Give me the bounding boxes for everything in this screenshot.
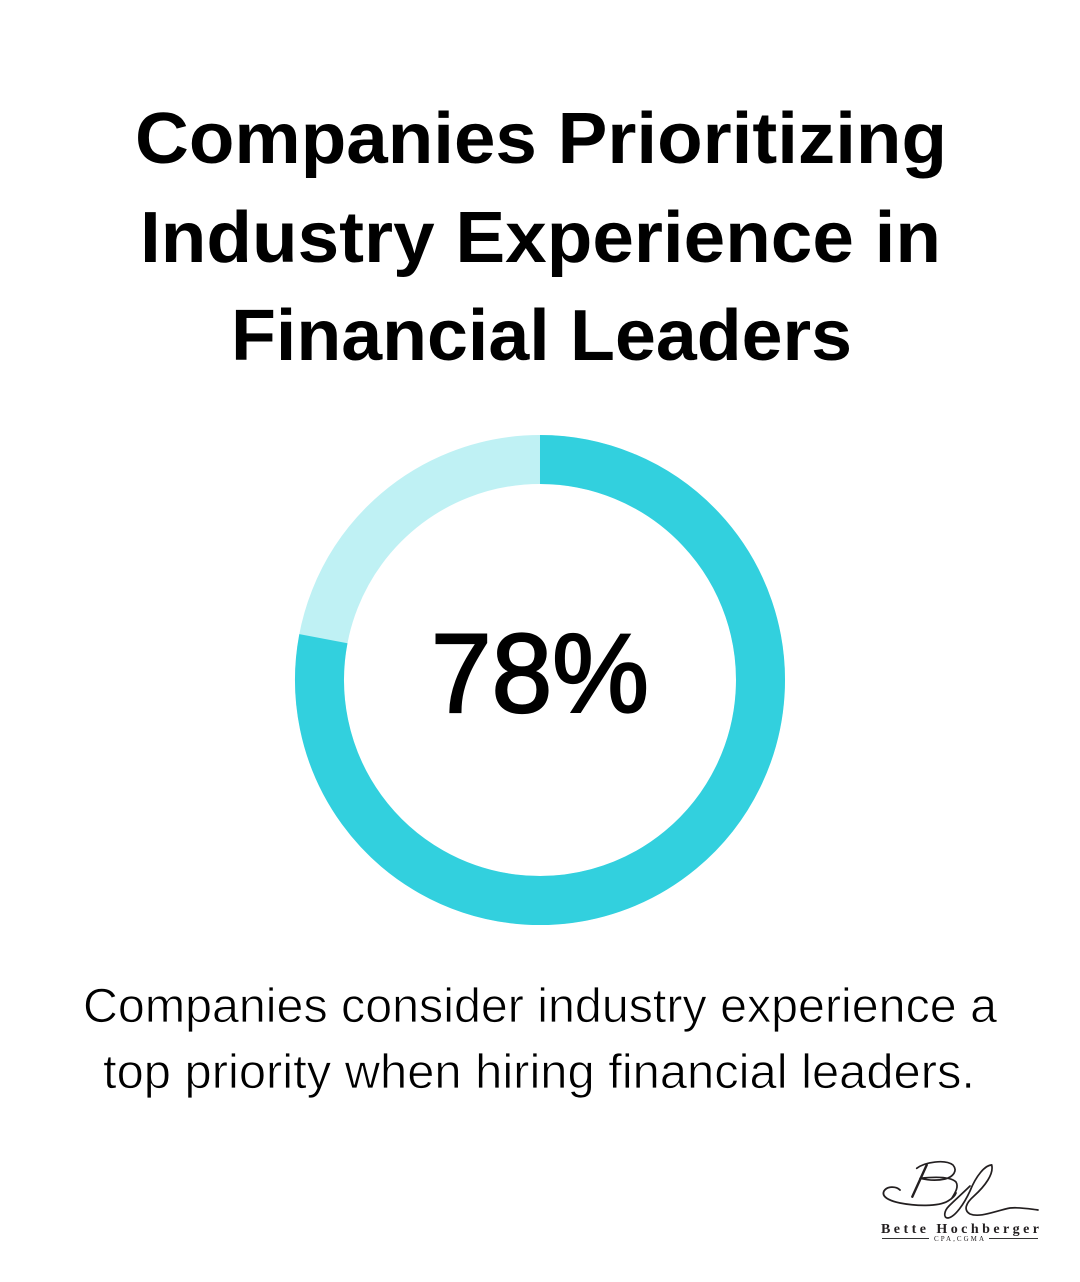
title [135,99,947,376]
title: Companies Prioritizing [135,99,947,179]
description text [83,980,997,1099]
logo rule left [882,1238,929,1239]
logo credentials: CPA,CGMA [934,1235,984,1243]
logo: Bette Hochberger signature [881,1162,1039,1243]
statistic: 78%: 78% [431,611,649,736]
description text: top priority when hiring financial leaders. [103,1046,975,1099]
donut chart: 78% [319,460,760,901]
logo rule right [989,1238,1038,1239]
logo name: Bette Hochberger [881,1222,1039,1237]
title: Industry Experience in [140,198,941,278]
description text: Companies consider industry experience a [83,980,997,1033]
title: Financial Leaders [231,296,852,376]
icon: BH monogram [883,1162,1038,1218]
